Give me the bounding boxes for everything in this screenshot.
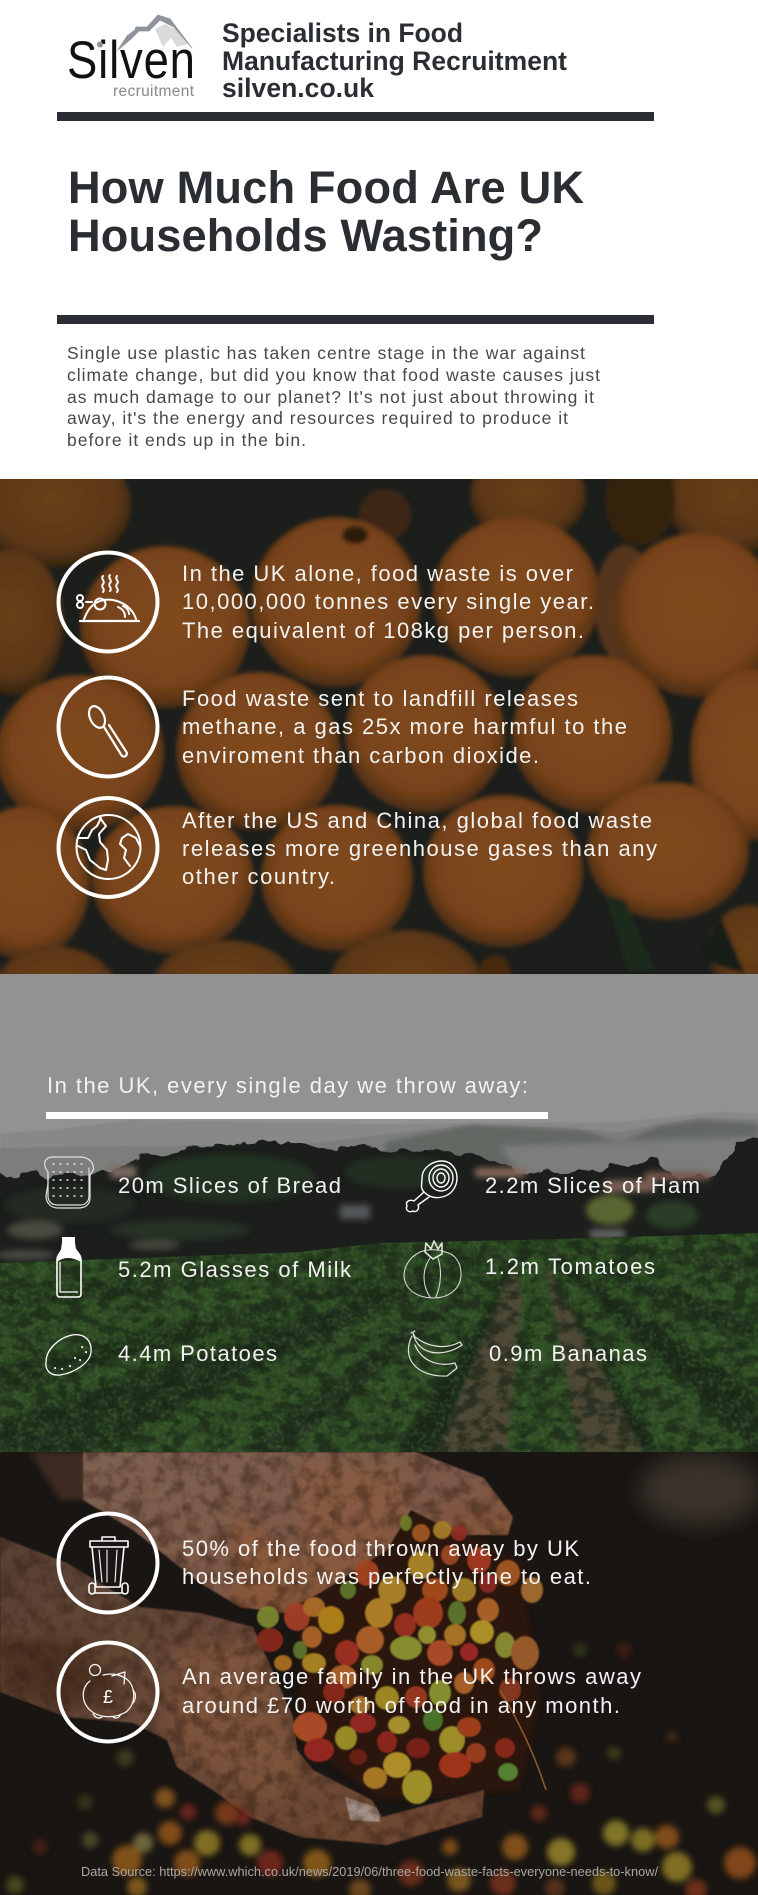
item: potatoes: 4.4m Potatoes [118,1341,277,1366]
fact text: methane: Food waste sent to landfill releases [182,686,578,711]
fact text: methane: methane, a gas 25x more harmful to the [182,714,627,739]
fact text: greenhouse gases: other country. [182,864,335,889]
icon: milk bottle [57,1237,81,1297]
intro text [67,343,600,450]
fact text: greenhouse gases: releases more greenhouse gases than any [182,836,657,861]
fact text: greenhouse gases [182,808,657,889]
fact text: perfectly fine: 50% of the food thrown away by UK [182,1536,579,1561]
intro text: as much damage to our planet? It's not just about throwing it [67,387,594,407]
header [67,15,567,103]
intro text: before it ends up in the bin. [67,430,306,450]
fact text: tonnes: The equivalent of 108kg per person. [182,618,584,643]
icon: piggy bank [58,1642,158,1742]
fact text: monthly cost: An average family in the UK throws away [182,1664,641,1689]
panel: oranges facts [0,479,758,974]
item: milk: 5.2m Glasses of Milk [118,1257,352,1282]
fact text: methane [182,686,627,768]
intro text: away, it's the energy and resources required to produce it [67,408,568,428]
logo: Silven recruitment: recruitment [113,83,195,100]
fact text: perfectly fine: households was perfectly fine to eat. [182,1564,591,1589]
fact text: perfectly fine [182,1536,591,1589]
tagline: Manufacturing Recruitment [222,46,567,76]
tagline [222,18,567,103]
field [0,1230,758,1452]
icon: roast turkey [58,552,158,652]
background photo: oranges [0,479,758,974]
fact text: monthly cost: around £70 worth of food in any month. [182,1693,620,1718]
second divider [57,315,654,324]
heading underline [46,1112,548,1119]
data source: Data Source: https://www.which.co.uk/news/2019/06/three-food-waste-facts-everyone-needs-to-know/ [81,1864,658,1879]
heading: In the UK, every single day we throw away: [47,1073,528,1098]
item: tomatoes: 1.2m Tomatoes [485,1254,655,1279]
intro text: climate change, but did you know that food waste causes just [67,365,600,385]
tagline: silven.co.uk [222,73,374,103]
title: How Much Food Are UK [68,162,584,213]
fact text: monthly cost [182,1664,641,1718]
title [68,162,584,261]
background photo: hands holding coffee cherries [0,1450,758,1895]
intro text: Single use plastic has taken centre stage in the war against [67,343,585,363]
icon: spoon [58,678,158,776]
icon: globe [58,798,158,897]
dark backdrop behind cherries [300,1510,540,1800]
icon: ham [406,1161,457,1212]
tagline: Specialists in Food [222,18,463,48]
blurred cherries [6,1642,756,1895]
sharp cherries [257,1515,543,1804]
icon: piggy bank: £ [103,1687,113,1707]
panel: household facts [0,1450,758,1895]
title: Households Wasting? [68,210,543,261]
logo: Silven recruitment [67,15,195,100]
icon: tomato [404,1241,461,1298]
fact text: greenhouse gases: After the US and China, global food waste [182,808,652,833]
icon: bread [45,1157,94,1208]
background photo: vineyard [0,974,758,1452]
icon: potato [46,1335,91,1375]
panel: daily waste [0,974,758,1452]
fact text: tonnes: 10,000,000 tonnes every single year. [182,589,594,614]
icon: wheelie bin [58,1514,158,1612]
fact text: methane: enviroment than carbon dioxide. [182,743,539,768]
logo: Silven recruitment: Silven [67,31,195,90]
item: ham: 2.2m Slices of Ham [485,1173,700,1198]
fact text: tonnes: In the UK alone, food waste is over [182,561,573,586]
fact text: tonnes [182,561,594,643]
item: bananas: 0.9m Bananas [489,1341,647,1366]
top divider [57,112,654,121]
icon: bananas [408,1331,462,1376]
item: bread: 20m Slices of Bread [118,1173,341,1198]
